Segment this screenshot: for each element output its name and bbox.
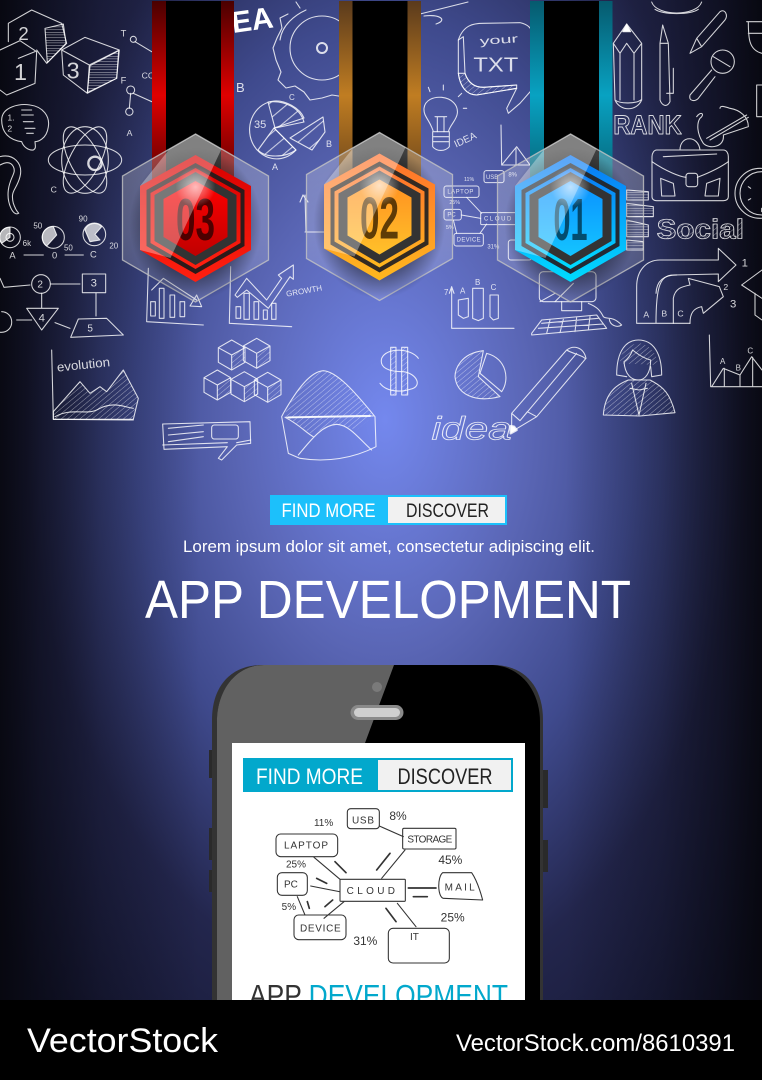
inner hexagon rings — [140, 155, 251, 282]
icon: list speech bubble — [2, 105, 49, 150]
cloud diagram: IT — [410, 932, 419, 943]
doodle: small bar and arrow marks — [300, 195, 330, 232]
body reflection — [217, 665, 394, 1010]
inner hexagon rings — [515, 155, 626, 282]
chart: line chart A B C — [709, 335, 762, 387]
icon: curved arrows A B C: 1 — [742, 258, 748, 270]
cloud diagram: 25% — [441, 911, 465, 925]
diagram: numbered process flow: 5 — [87, 324, 93, 335]
chart: pie with slice labelled 35 — [236, 80, 332, 172]
icon: list speech bubble: 2 — [7, 124, 12, 134]
chart: 3D bars marker — [747, 22, 762, 117]
glass hexagon — [498, 134, 644, 302]
diagram: connected nodes: A — [127, 128, 133, 138]
icon: light bulb — [415, 85, 479, 150]
diagram: numbered process flow: 3 — [91, 278, 97, 290]
screen title: APP DEVELOPMENT — [249, 978, 508, 1013]
icon: curved arrows A B C: C — [677, 309, 684, 319]
diagram: small cloud map: CLOUD — [484, 217, 512, 223]
icon: graduation cap — [742, 270, 762, 320]
doodles: centre top — [229, 1, 532, 260]
chart: growth bar chart — [229, 265, 323, 327]
icon: speech box — [163, 422, 251, 460]
chart: small donut charts: 50 — [64, 244, 73, 253]
subtitle: Lorem ipsum dolor sit amet, consectetur adipiscing elit. — [183, 538, 595, 556]
icon: dollar sign — [380, 347, 418, 395]
icon: numbered cubes: 3 — [67, 58, 80, 84]
icon: books stack — [627, 190, 653, 250]
chart: growth bar chart: GROWTH — [285, 283, 323, 299]
chart: small donut charts: 6k — [23, 239, 31, 248]
doodles: right column — [444, 2, 762, 416]
icon: numbered cubes: 1 — [14, 59, 27, 85]
text: idea lettering: idea — [432, 409, 512, 446]
icon: glasses — [697, 106, 748, 147]
icon: speech bubble your txt: your — [479, 33, 519, 48]
text: RANK lettering: RANK — [613, 110, 682, 140]
chart: small donut charts: 50 — [33, 221, 43, 230]
icon: curved arrows A B C — [637, 248, 748, 323]
chart: pie with slice labelled 35: A — [272, 162, 278, 172]
chart: line chart A B C: A — [720, 357, 726, 366]
phone body — [212, 665, 543, 1010]
diagram: small cloud map: 31% — [487, 245, 500, 251]
chart: line chart A B C: C — [747, 346, 753, 355]
button pair: find more, discover: DISCOVER — [406, 500, 489, 522]
diagram: small cloud map: DEVICE — [457, 238, 481, 244]
reflection — [140, 134, 222, 258]
number 02: 02 — [360, 186, 399, 252]
cloud diagram: 25% — [286, 859, 306, 870]
chart: 3D bars A B C: C — [491, 283, 497, 292]
chart: axis with triangle — [501, 125, 530, 165]
doodle: curved line near gear — [420, 2, 468, 24]
number 01: 01 — [554, 187, 588, 253]
diagram: numbered process flow — [0, 274, 123, 337]
badge 01 — [498, 134, 644, 302]
badge 03 — [122, 134, 268, 302]
screen buttons — [243, 758, 513, 792]
chart: small donut charts: 90 — [79, 215, 88, 224]
number 03: 03 — [176, 187, 215, 253]
icon: briefcase — [652, 139, 728, 201]
diagram: small cloud map: USB — [486, 175, 498, 181]
ribbon: blue — [530, 1, 612, 191]
cloud diagram: PC — [284, 880, 298, 891]
button pair: find more, discover: FIND MORE — [282, 500, 376, 522]
diagram: small cloud map: 8% — [508, 173, 518, 179]
cloud diagram — [276, 809, 483, 963]
icon: atom: C — [51, 185, 57, 195]
icon: speech bubble your txt: TXT — [473, 54, 519, 77]
chart: small donut charts: A — [9, 250, 16, 260]
diagram: connected nodes — [121, 29, 155, 138]
cloud diagram: LAPTOP — [284, 841, 328, 852]
cloud diagram: 31% — [353, 934, 378, 948]
inner hexagon rings — [324, 154, 435, 280]
title: APP DEVELOPMENT — [145, 570, 631, 630]
icon: numbered cubes — [0, 10, 119, 95]
icon: numbered cubes: 2 — [18, 23, 29, 44]
chart: line chart A B C: B — [736, 364, 741, 373]
cloud diagram: DEVICE — [300, 923, 341, 934]
cloud diagram: CLOUD — [347, 886, 395, 897]
icon: magnifying glass — [690, 50, 734, 101]
cloud diagram: USB — [352, 815, 374, 826]
footer bar — [0, 1000, 762, 1080]
chart: pie with removed slice — [455, 351, 506, 399]
reflection — [515, 134, 596, 258]
chart: small donut charts: 20 — [109, 241, 119, 250]
chart: pie with slice labelled 35: 35 — [254, 119, 266, 131]
chart: small donut charts: 0 — [52, 250, 57, 260]
icon: speech bubble your txt — [458, 23, 532, 113]
icon: isometric cubes — [204, 338, 281, 402]
diagram: small cloud map: 11% — [464, 177, 475, 183]
icon: question mark — [0, 156, 21, 214]
footer reference: VectorStock.com/8610391 — [456, 1030, 735, 1057]
ribbon: red — [152, 1, 234, 191]
reflection — [324, 132, 406, 256]
button pair: find more, discover — [270, 495, 507, 525]
icon: list speech bubble: 1. — [7, 113, 15, 123]
diagram: numbered process flow: 4 — [39, 313, 45, 325]
cloud diagram: STORAGE — [407, 835, 453, 846]
icon: big pencil — [511, 347, 586, 433]
icon: coin stack — [652, 2, 702, 14]
diagram: connected nodes: CO — [142, 70, 155, 80]
cloud diagram: 8% — [389, 809, 407, 823]
camera — [372, 682, 382, 692]
chart: small donut charts — [0, 215, 119, 260]
diagram: small cloud map: PC — [447, 213, 456, 219]
cloud diagram: MAIL — [445, 883, 475, 894]
icon: pen — [660, 25, 673, 105]
chart: evolution area chart — [52, 350, 138, 420]
diagram: small cloud map: 5% — [446, 225, 454, 231]
footer brand: VectorStock — [27, 1022, 219, 1060]
icon: computer with keyboard and mouse — [532, 272, 622, 335]
side buttons — [209, 750, 548, 892]
icon: curved arrows A B C: B — [661, 309, 667, 319]
chart: pie with slice labelled 35: C — [289, 93, 295, 102]
glass hexagon — [306, 132, 452, 300]
doodles: centre row — [163, 338, 512, 460]
text: Social lettering: Social — [657, 214, 744, 245]
chart: 3D bars A B C: A — [460, 286, 466, 295]
icon: envelope — [282, 371, 376, 460]
diagram: connected nodes: F — [121, 75, 127, 85]
icon: curved arrows A B C: A — [643, 309, 649, 319]
icon: pencil diagonal — [690, 11, 726, 53]
icon: clock — [735, 168, 762, 218]
icon: atom — [48, 121, 122, 199]
chart: pie with slice labelled 35: B — [236, 80, 245, 95]
chart: pie with slice labelled 35: B — [326, 139, 332, 149]
cloud diagram: 11% — [314, 818, 333, 829]
chart: 3D bars A B C: B — [475, 278, 480, 287]
screen buttons: DISCOVER — [398, 764, 492, 789]
chart: bar chart with arrow — [147, 268, 203, 325]
diagram: small cloud map: LAPTOP — [447, 190, 473, 196]
chart: 3D bars A B C: 7 — [444, 288, 449, 297]
icon: gear — [273, 2, 362, 100]
diagram: numbered process flow: 2 — [37, 279, 43, 290]
icon: light bulb: IDEA — [453, 130, 479, 150]
screen buttons: FIND MORE — [256, 764, 363, 789]
cloud diagram: 45% — [438, 853, 463, 867]
ribbon: orange — [339, 1, 421, 191]
diagram: small cloud map: 25% — [449, 200, 460, 206]
chart: evolution area chart: evolution — [56, 355, 111, 375]
diagram: small cloud map — [444, 171, 532, 260]
glass hexagon — [122, 134, 268, 302]
badge 02 — [306, 132, 452, 300]
icon: woman in suit — [603, 340, 675, 416]
icon: curved arrows A B C: 2 — [723, 282, 728, 292]
chart: small donut charts: C — [90, 249, 97, 259]
diagram: connected nodes: T — [121, 29, 127, 39]
cloud diagram: 5% — [282, 902, 296, 913]
doodles: left column — [0, 10, 323, 420]
screen — [232, 743, 525, 1013]
phone mockup — [209, 665, 548, 1013]
chart: 3D bars A B C — [444, 278, 514, 328]
icon: pencil upright — [613, 24, 642, 109]
speaker — [350, 705, 404, 720]
icon: curved arrows A B C: 3 — [730, 298, 736, 310]
text: IDEA lettering: EA — [229, 1, 275, 40]
